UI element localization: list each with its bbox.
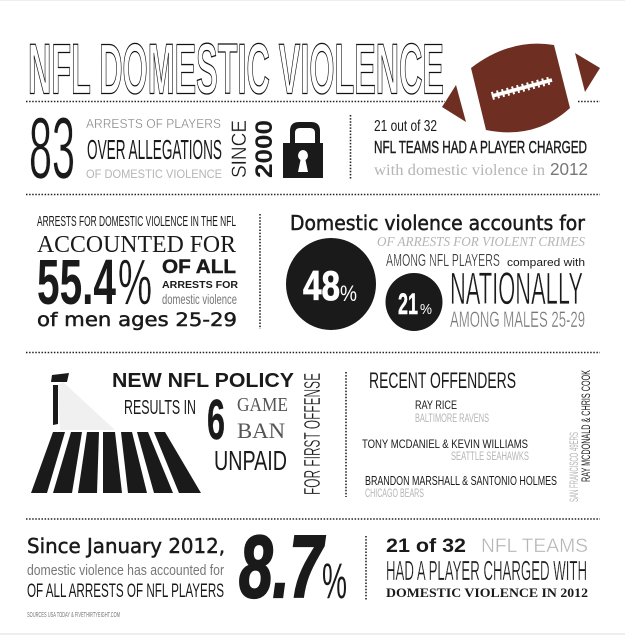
panel: 83 arrests xyxy=(29,100,323,197)
heading: recent offenders: RECENT OFFENDERS xyxy=(369,368,516,393)
text: accounted for: ACCOUNTED FOR xyxy=(37,232,236,258)
big number 8.7 percent: 8.7 xyxy=(239,517,326,616)
heading: new NFL policy: NEW NFL POLICY xyxy=(112,370,295,392)
text: of all arrests of NFL players: OF ALL ARRESTS OF NFL PLAYERS xyxy=(27,581,224,602)
text: Ray Rice: RAY RICE xyxy=(415,399,457,412)
big number 55.4 percent: % xyxy=(118,246,152,318)
text: 21 out of 32: 21 out of 32 xyxy=(374,118,437,135)
panel: 55.4 percent xyxy=(37,214,238,331)
text: of arrests for violent crimes: OF ARRESTS FOR VIOLENT CRIMES xyxy=(377,234,585,249)
icon: padlock xyxy=(283,122,323,178)
circle: 21 percent: % xyxy=(420,301,432,318)
text: Chicago Bears: CHICAGO BEARS xyxy=(365,487,424,500)
circle: 21 percent xyxy=(386,273,442,331)
text: Ray McDonald and Chris Cook: RAY MCDONALD & CHRIS COOK xyxy=(580,370,593,482)
text: San Francisco 49ers: SAN FRANCISCO 49ERS xyxy=(568,432,581,502)
text: sources: SOURCES USA TODAY & FIVETHIRTYEIGHT.COM xyxy=(27,610,120,619)
panel: 48 percent versus 21 percent xyxy=(286,211,586,332)
text: arrests for: ARRESTS FOR xyxy=(162,279,238,291)
text: Baltimore Ravens: BALTIMORE RAVENS xyxy=(415,412,489,425)
text: 2000: 2000 xyxy=(251,120,278,178)
text: of all: OF ALL xyxy=(162,257,236,278)
text: NFL teams: NFL TEAMS xyxy=(481,536,588,557)
panel: 83 arrests: OVER ALLEGATIONS xyxy=(87,134,222,165)
text: 21 of 32: 21 of 32 xyxy=(386,536,466,557)
text: among NFL players: AMONG NFL PLAYERS xyxy=(386,250,500,270)
text: since: SINCE xyxy=(228,120,251,178)
circle: 21 percent: 21 xyxy=(398,288,418,321)
text: unpaid: UNPAID xyxy=(214,445,287,476)
icon: stadium field with light xyxy=(31,373,201,493)
text: compared with: compared with xyxy=(507,257,585,269)
panel: new NFL policy xyxy=(112,370,325,495)
big number 8.7 percent: % xyxy=(322,553,347,609)
panel: 21 of 32 NFL teams xyxy=(386,536,588,600)
text: Seattle Seahawks: SEATTLE SEAHAWKS xyxy=(451,449,529,463)
text: domestic violence has accounted for: domestic violence has accounted for xyxy=(27,562,224,579)
text: of domestic violence: OF DOMESTIC VIOLENCE xyxy=(86,167,222,181)
text: arrests of players: ARRESTS OF PLAYERS xyxy=(86,116,221,131)
text: of men ages 25-29: of men ages 25-29 xyxy=(37,309,237,331)
big number 55.4 percent: 55.4 xyxy=(37,246,116,318)
text: arrests for domestic violence in the NFL: ARRESTS FOR DOMESTIC VIOLENCE IN THE NFL xyxy=(37,214,236,230)
text: domestic violence: domestic violence xyxy=(162,291,237,307)
panel: 83 arrests: 83 xyxy=(29,100,75,197)
text: game: GAME xyxy=(237,395,288,416)
circle: 48 percent xyxy=(286,238,376,330)
text: results in: RESULTS IN xyxy=(124,397,196,419)
text: with domestic violence in: with domestic violence in xyxy=(374,162,545,179)
text: domestic violence in 2012: DOMESTIC VIOLENCE IN 2012 xyxy=(386,586,588,600)
text: for first offense: FOR FIRST OFFENSE xyxy=(299,373,325,495)
heading: domestic violence accounts for: Domestic violence accounts for xyxy=(290,211,586,235)
big number 6: 6 xyxy=(207,388,225,451)
panel: since January 2012 xyxy=(27,517,347,616)
panel: 21 out of 32 xyxy=(374,118,588,179)
icon: football xyxy=(442,44,600,132)
heading: since January 2012: Since January 2012, xyxy=(27,534,225,558)
circle: 48 percent: % xyxy=(340,281,357,306)
panel: recent offenders xyxy=(362,368,593,502)
text: 2012: 2012 xyxy=(550,159,588,179)
text: ban: BAN xyxy=(237,418,285,443)
text: Tony McDaniel and Kevin Williams: TONY MCDANIEL & KEVIN WILLIAMS xyxy=(362,437,528,451)
circle: 48 percent: 48 xyxy=(303,262,340,309)
